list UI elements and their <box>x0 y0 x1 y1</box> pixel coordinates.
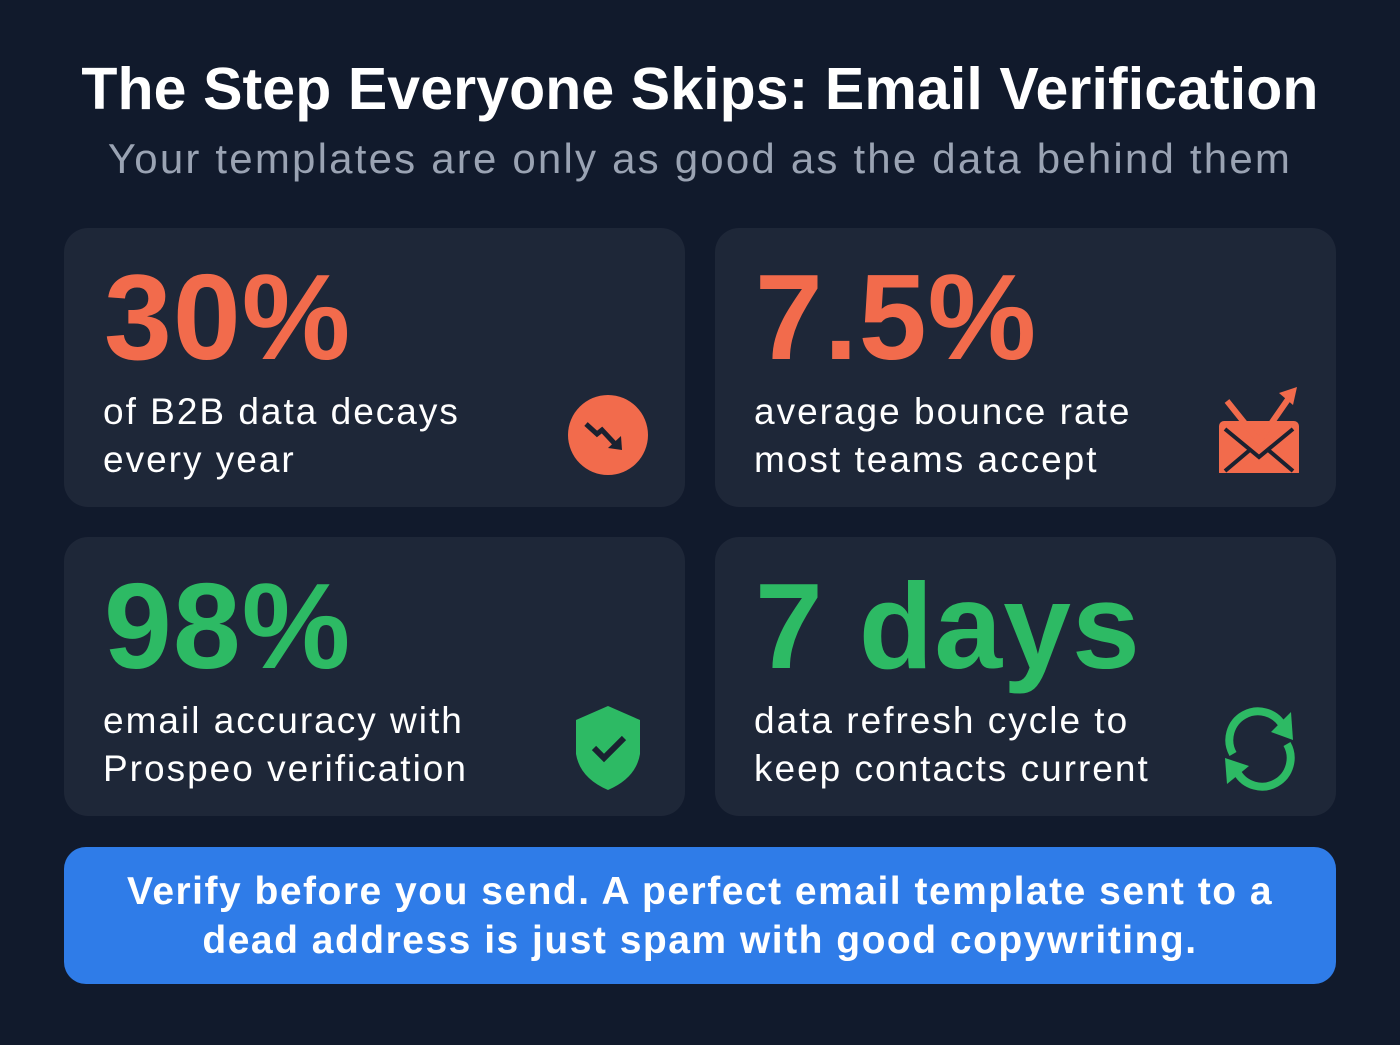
icon: trending down <box>568 395 648 475</box>
subtitle: Your templates are only as good as the data behind them <box>108 135 1292 182</box>
stat label: keep contacts current <box>754 748 1150 789</box>
stat label <box>754 700 1150 789</box>
icon: shield check <box>576 706 640 790</box>
icon: envelope with arrow <box>1219 387 1299 473</box>
callout banner <box>64 847 1336 984</box>
callout banner: dead address is just spam with good copywriting. <box>202 919 1198 962</box>
panel: 98% accuracy <box>64 537 685 816</box>
stat label <box>103 391 460 480</box>
stat number: 7 days <box>755 558 1141 694</box>
stat label: email accuracy with <box>103 700 464 741</box>
panel: 7 days refresh <box>715 537 1336 816</box>
stat label: Prospeo verification <box>103 748 468 789</box>
icon: refresh <box>1225 707 1295 791</box>
stat label: of B2B data decays <box>103 391 460 432</box>
stat number: 98% <box>104 558 351 694</box>
stat label <box>754 391 1131 480</box>
stat number: 30% <box>104 249 351 385</box>
stat label: data refresh cycle to <box>754 700 1129 741</box>
title: The Step Everyone Skips: Email Verification <box>81 56 1319 122</box>
stat label: average bounce rate <box>754 391 1131 432</box>
panel: 7.5% bounce <box>715 228 1336 507</box>
stat label: most teams accept <box>754 439 1099 480</box>
stat label <box>103 700 468 789</box>
stat label: every year <box>103 439 296 480</box>
stat number: 7.5% <box>755 249 1037 385</box>
callout banner: Verify before you send. A perfect email template sent to a <box>127 870 1273 913</box>
panel: 30% decay <box>64 228 685 507</box>
